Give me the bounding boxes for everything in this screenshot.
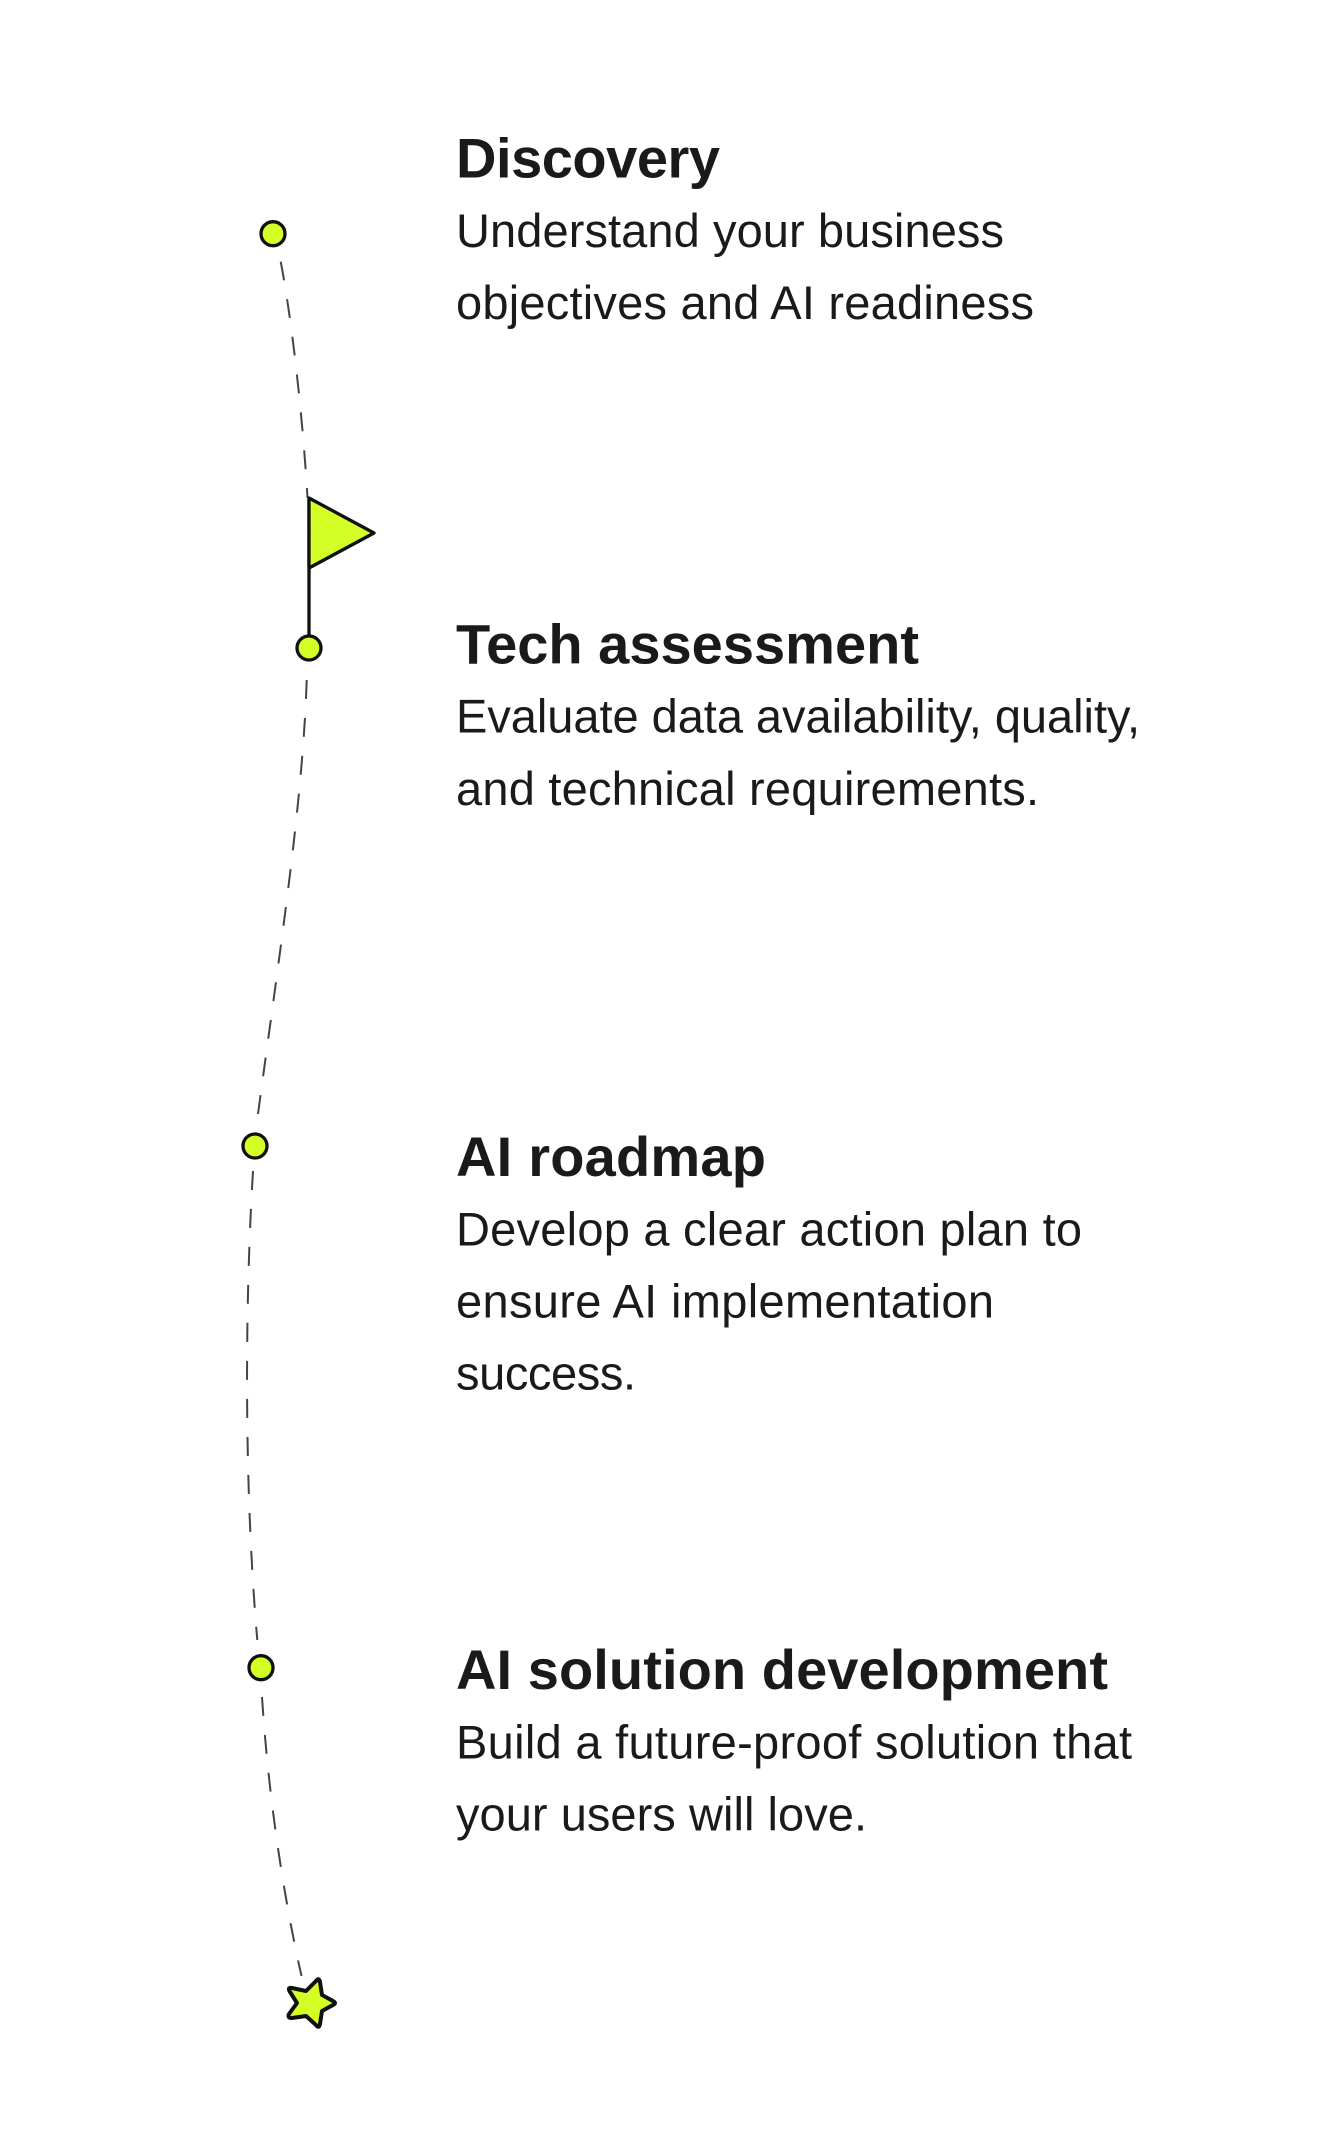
marker: tech assessment	[297, 636, 321, 660]
text: Tech assessment description: Evaluate data availability, quality,	[456, 690, 1140, 742]
text: Discovery description: Understand your business	[456, 204, 1004, 257]
text: AI roadmap description: success.	[456, 1346, 636, 1400]
icon: star	[288, 1979, 335, 2027]
heading: AI roadmap: AI roadmap	[456, 1125, 766, 1188]
dashed route: tech assessment to roadmap	[258, 680, 307, 1114]
marker: AI roadmap	[243, 1134, 267, 1158]
step: Tech assessment	[456, 612, 1140, 815]
step: AI solution development	[456, 1638, 1132, 1841]
text: AI solution development description: your users will love.	[456, 1788, 867, 1841]
text: Discovery description: objectives and AI readiness	[456, 276, 1034, 329]
marker: discovery	[261, 222, 285, 246]
step: AI roadmap	[456, 1125, 1082, 1400]
dashed route: solution development to star	[262, 1697, 302, 1976]
dashed route: discovery to flag	[281, 262, 308, 498]
heading: Tech assessment: Tech assessment	[456, 612, 919, 675]
icon: flag	[309, 498, 374, 640]
step: Discovery	[456, 127, 1034, 329]
dashed route: roadmap to solution development	[247, 1171, 257, 1640]
text: AI roadmap description: ensure AI implementation	[456, 1274, 994, 1328]
text: AI solution development description: Build a future-proof solution that	[456, 1716, 1132, 1768]
marker: AI solution development	[249, 1656, 273, 1680]
text: Tech assessment description: and technical requirements.	[456, 762, 1039, 815]
heading: AI solution development: AI solution development	[456, 1638, 1108, 1701]
text: AI roadmap description: Develop a clear action plan to	[456, 1202, 1082, 1256]
heading: Discovery: Discovery	[456, 127, 720, 190]
